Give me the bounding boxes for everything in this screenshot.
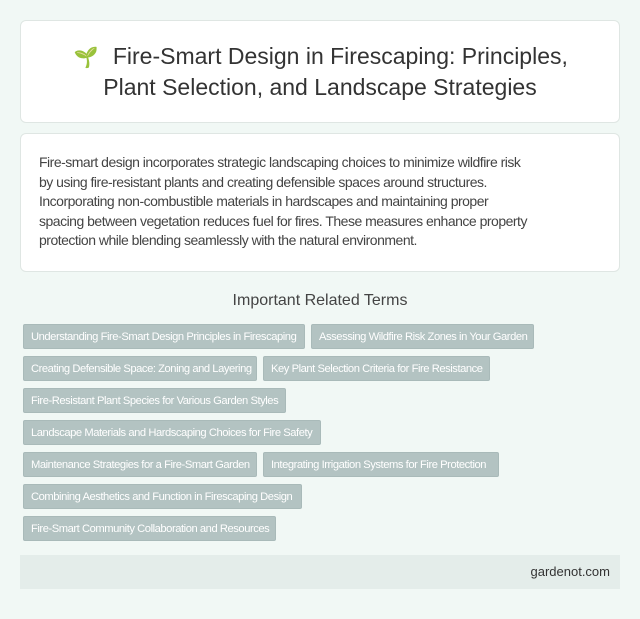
heading: related terms: Important Related Terms bbox=[233, 292, 407, 309]
tag 4 bbox=[263, 356, 490, 381]
icon: seedling: 🌱 bbox=[74, 47, 99, 69]
tag 2: Assessing Wildfire Risk Zones in Your Garden bbox=[319, 331, 527, 343]
description card bbox=[20, 133, 620, 272]
tag 8 bbox=[263, 452, 499, 477]
tag 10: Fire-Smart Community Collaboration and Resources bbox=[31, 523, 269, 535]
title: Plant Selection, and Landscape Strategies bbox=[103, 74, 537, 100]
title bbox=[74, 43, 568, 100]
tag 9 bbox=[23, 484, 302, 509]
tag 7: Maintenance Strategies for a Fire-Smart Garden bbox=[31, 459, 250, 471]
tag 4: Key Plant Selection Criteria for Fire Resistance bbox=[271, 363, 483, 375]
tag 8: Integrating Irrigation Systems for Fire Protection bbox=[271, 459, 486, 471]
tag 5: Fire-Resistant Plant Species for Various Garden Styles bbox=[31, 395, 278, 407]
title: Fire-Smart Design in Firescaping: Principles, bbox=[113, 43, 568, 69]
tag 10 bbox=[23, 516, 276, 541]
description text: Fire-smart design incorporates strategic landscaping choices to minimize wildfire risk bbox=[39, 154, 520, 170]
tag 6: Landscape Materials and Hardscaping Choices for Fire Safety bbox=[31, 427, 312, 439]
tag 9: Combining Aesthetics and Function in Firescaping Design bbox=[31, 491, 292, 503]
tag 3: Creating Defensible Space: Zoning and Layering bbox=[31, 363, 252, 375]
description text bbox=[39, 154, 528, 248]
tag 1: Understanding Fire-Smart Design Principles in Firescaping bbox=[31, 331, 296, 343]
tag 1 bbox=[23, 324, 305, 349]
tag 6 bbox=[23, 420, 321, 445]
description text: by using fire-resistant plants and creating defensible spaces around structures. bbox=[39, 174, 487, 190]
tag 3 bbox=[23, 356, 257, 381]
footer bbox=[20, 555, 620, 589]
description text: protection while blending seamlessly with the natural environment. bbox=[39, 232, 417, 248]
tag 2 bbox=[311, 324, 534, 349]
footer text: gardenot.com bbox=[530, 564, 610, 579]
tag 7 bbox=[23, 452, 257, 477]
tag 5 bbox=[23, 388, 286, 413]
description text: spacing between vegetation reduces fuel for fires. These measures enhance property bbox=[39, 212, 527, 228]
title card bbox=[20, 20, 620, 123]
description text: Incorporating non-combustible materials in hardscapes and maintaining proper bbox=[39, 193, 488, 209]
